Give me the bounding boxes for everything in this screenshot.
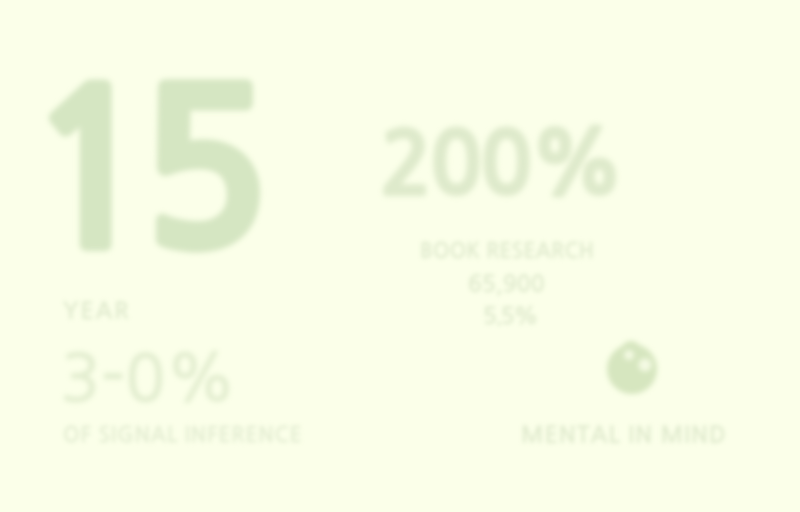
label: of signal inference: OF SIGNAL INFERENCE [63,425,303,446]
label: book research: BOOK RESEARCH [420,241,594,262]
icon: green ball [605,339,659,396]
label: 65,900: 65,900 [468,274,545,296]
stat: 3-0%: 3-0% [61,347,238,411]
stat: 200%: 200% [380,122,622,207]
big number: 15: 15 [26,66,253,278]
label: mental in mind: MENTAL IN MIND [521,425,727,447]
label: 5.5%: 5.5% [483,306,537,328]
label: year: YEAR [63,301,131,323]
